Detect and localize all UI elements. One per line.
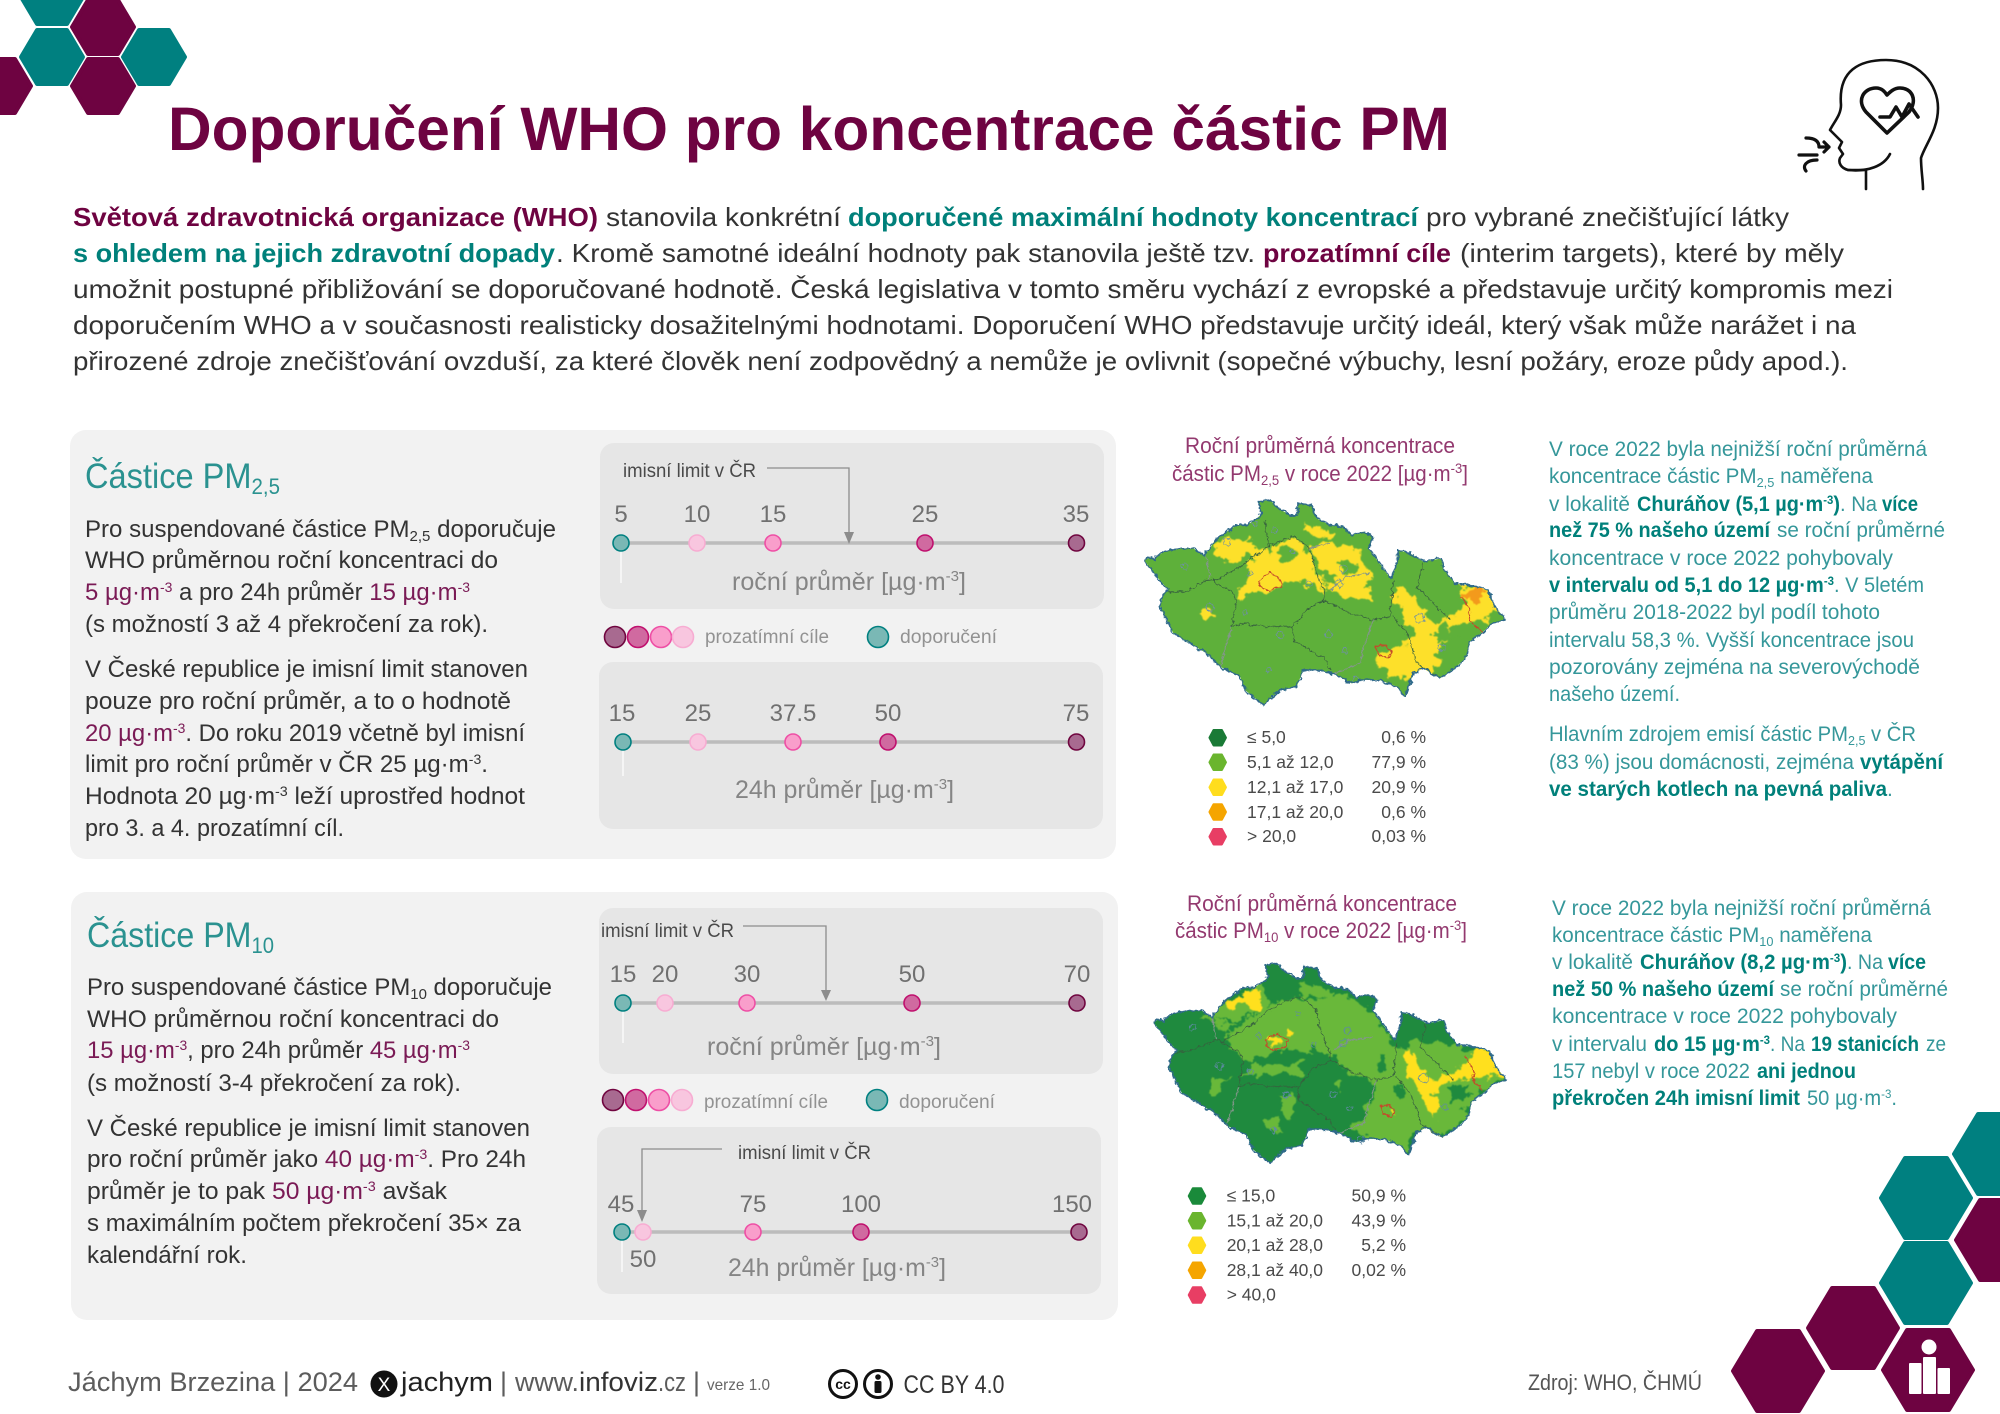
chart: annual average PM10: -3: [921, 1033, 934, 1050]
side text PM2.5: než 75 % našeho území: [1549, 519, 1771, 542]
footer: licence: [830, 1370, 1004, 1399]
decorative hexagons: bottom right: [1733, 1114, 2000, 1411]
legend PM10: [1189, 1186, 1406, 1304]
text block PM2.5: a pro 24h průměr: [172, 579, 369, 606]
side text PM10: než 50 % našeho území: [1552, 978, 1775, 1001]
text block PM10: 15 µg·m: [87, 1037, 175, 1064]
legend: targets: doporučení: [899, 1092, 996, 1113]
text block PM2.5: Pro suspendované částice PM: [85, 516, 409, 543]
side text PM10: více: [1888, 951, 1926, 974]
chart: annual average PM2.5: 25: [912, 501, 938, 528]
side text PM2.5: ve starých kotlech na pevná paliva: [1549, 778, 1887, 801]
side text PM10: překročen 24h imisní limit: [1552, 1087, 1800, 1110]
footer: licence: cc: [835, 1376, 851, 1392]
side text PM10: v intervalu: [1552, 1033, 1647, 1056]
footer: author: |: [693, 1367, 700, 1397]
side text PM2.5: v ČR: [1865, 723, 1916, 746]
legend PM10: 5,2 %: [1361, 1235, 1406, 1255]
side text PM2.5: V roce 2022 byla nejnižší roční průměrná: [1549, 438, 1927, 461]
text block PM10: . Pro 24h: [427, 1146, 526, 1173]
chart: 24h average PM2.5: 24h průměr [µg·m: [735, 776, 934, 804]
side text PM10: 19 stanicích: [1811, 1033, 1919, 1056]
side text PM10: -3: [1830, 951, 1841, 965]
chart: annual average PM2.5: [600, 443, 1104, 609]
side text PM2.5: naměřena: [1774, 465, 1873, 488]
map title PM10: [1175, 891, 1467, 945]
side text PM2.5: průměru 2018-2022 byl podíl tohoto: [1549, 601, 1880, 624]
text block PM2.5: limit pro roční průměr v ČR 25 µg·m: [85, 751, 467, 778]
side text PM2.5: 2,5: [1848, 733, 1865, 748]
side text PM10: 10: [1759, 934, 1773, 949]
side text PM2.5: [1549, 438, 1945, 801]
text block PM2.5: pro 3. a 4. prozatímní cíl.: [85, 815, 344, 842]
chart: 24h average PM2.5: 15: [609, 700, 635, 727]
side text PM10: Churáňov (8,2 µg·m: [1640, 951, 1836, 974]
legend PM10: 43,9 %: [1352, 1210, 1406, 1230]
map PM2.5: [1144, 500, 1505, 705]
icon: infoviz logo: [1909, 1340, 1950, 1394]
legend PM2.5: 0,6 %: [1381, 802, 1426, 822]
map title PM2.5: v roce 2022 [µg·m: [1279, 461, 1451, 486]
intro text: (interim targets), které by měly: [1460, 238, 1844, 268]
chart: 24h average PM10: 50: [630, 1246, 656, 1273]
text block PM2.5: 15 µg·m: [369, 579, 458, 606]
chart: 24h average PM2.5: 25: [685, 700, 711, 727]
map title PM10: Roční průměrná koncentrace: [1187, 891, 1457, 916]
intro text: Světová zdravotnická organizace (WHO): [73, 202, 598, 232]
side text PM2.5: ): [1833, 493, 1840, 516]
chart: 24h average PM2.5: ]: [947, 776, 954, 804]
map title PM10: částic PM: [1175, 918, 1270, 943]
text block PM10: WHO průměrnou roční koncentraci do: [87, 1006, 499, 1033]
text block PM10: s maximálním počtem překročení 35× za: [87, 1210, 522, 1237]
legend PM10: 50,9 %: [1352, 1186, 1406, 1206]
panel: PM2.5: [70, 430, 1116, 859]
side text PM2.5: Churáňov (5,1 µg·m: [1637, 493, 1833, 516]
legend PM2.5: 17,1 až 20,0: [1247, 802, 1344, 822]
footer: author: www.: [514, 1367, 579, 1397]
chart: annual average PM10: [599, 908, 1103, 1074]
legend: targets: prozatímní cíle: [704, 1092, 828, 1113]
intro text: s ohledem na jejich zdravotní dopady: [73, 238, 556, 268]
chart: annual average PM10: roční průměr [µg·m: [707, 1033, 920, 1061]
chart: annual average PM2.5: roční průměr [µg·m: [732, 568, 945, 596]
side text PM10: v lokalitě: [1552, 951, 1633, 974]
side text PM10: koncentrace částic PM: [1552, 924, 1763, 947]
text block PM10: průměr je to pak 50 µg·m: [87, 1178, 361, 1205]
side text PM2.5: koncentrace v roce 2022 pohybovaly: [1549, 547, 1893, 570]
chart: annual average PM2.5: -3: [946, 568, 959, 585]
icon: head with heart and breath: [1799, 60, 1938, 189]
text block PM10: doporučuje: [427, 974, 552, 1001]
chart: annual average PM2.5: ]: [959, 568, 966, 596]
side text PM2.5: vytápění: [1860, 751, 1944, 774]
map title PM2.5: ]: [1462, 461, 1468, 486]
text block PM10: 10: [410, 986, 427, 1003]
text block PM2.5: -3: [173, 720, 186, 736]
chart: 24h average PM10: ]: [939, 1254, 946, 1282]
side text PM10: -3: [1760, 1033, 1770, 1047]
side text PM10: V roce 2022 byla nejnižší roční průměrná: [1552, 897, 1931, 920]
side text PM2.5: koncentrace částic PM: [1549, 465, 1760, 488]
text block PM2.5: . Do roku 2019 včetně byl imisní: [185, 720, 525, 747]
legend PM10: 0,02 %: [1352, 1260, 1406, 1280]
intro text: pro vybrané znečišťující látky: [1426, 202, 1789, 232]
footer: author: [68, 1367, 770, 1398]
legend PM2.5: 12,1 až 17,0: [1247, 777, 1344, 797]
side text PM2.5: Hlavním zdrojem emisí částic PM: [1549, 723, 1859, 746]
side text PM2.5: (83 %) jsou domácnosti, zejména: [1549, 751, 1854, 774]
side text PM10: .: [1891, 1087, 1897, 1110]
side text PM10: ani jednou: [1757, 1060, 1856, 1083]
text block PM10: (s možností 3-4 překročení za rok).: [87, 1070, 461, 1097]
legend PM2.5: > 20,0: [1247, 826, 1296, 846]
side text PM10: . Na: [1770, 1033, 1805, 1056]
legend PM10: ≤ 15,0: [1227, 1186, 1275, 1206]
chart: annual average PM10: 30: [734, 961, 760, 988]
text block PM2.5: V České republice je imisní limit stanoven: [85, 655, 528, 683]
text block PM10: Pro suspendované částice PM: [87, 974, 411, 1001]
chart: 24h average PM10: 75: [740, 1191, 766, 1218]
legend PM2.5: 5,1 až 12,0: [1247, 752, 1334, 772]
text block PM2.5: [85, 516, 556, 842]
footer: author: |: [500, 1367, 507, 1397]
map title PM10: v roce 2022 [µg·m: [1278, 918, 1450, 943]
footer: author: Jáchym Brzezina | 2024: [68, 1367, 358, 1397]
chart: 24h average PM2.5: 75: [1063, 700, 1089, 727]
text block PM2.5: .: [481, 751, 488, 778]
source: Zdroj: WHO, ČHMÚ: [1528, 1370, 1702, 1395]
legend PM2.5: 77,9 %: [1372, 752, 1426, 772]
side text PM10: se roční průměrné: [1780, 978, 1948, 1001]
intro text: . Kromě samotné ideální hodnoty pak stanovila ještě tzv.: [556, 238, 1255, 268]
chart: 24h average PM10: 45: [608, 1191, 634, 1218]
map title PM10: ]: [1461, 918, 1467, 943]
side text PM2.5: 2,5: [1757, 475, 1774, 490]
map PM10: [1153, 963, 1506, 1163]
heading PM10: 10: [251, 933, 274, 958]
map title PM2.5: Roční průměrná koncentrace: [1185, 433, 1455, 458]
footer: author: infoviz: [579, 1367, 658, 1397]
chart: 24h average PM10: 150: [1052, 1191, 1092, 1218]
text block PM10: , pro 24h průměr: [187, 1037, 370, 1064]
chart: 24h average PM10: -3: [926, 1254, 939, 1271]
text block PM10: pro roční průměr jako 40 µg·m: [87, 1146, 413, 1173]
decorative hexagons: top left: [0, 0, 185, 113]
text block PM2.5: Hodnota 20 µg·m: [85, 783, 271, 810]
heading PM2.5: Částice PM: [85, 457, 264, 496]
chart: 24h average PM2.5: -3: [934, 776, 947, 793]
side text PM2.5: pozorovány zejména na severovýchodě: [1549, 656, 1920, 679]
intro text: umožnit postupné přibližování se doporučované hodnotě. Česká legislativa v tomto směru vychází z evropské a představuje určitý kompromis mezi: [73, 274, 1893, 304]
legend PM10: 15,1 až 20,0: [1227, 1210, 1323, 1230]
chart: annual average PM2.5: 10: [684, 501, 710, 528]
chart: annual average PM2.5: imisní limit v ČR: [623, 460, 756, 482]
side text PM2.5: našeho území.: [1549, 683, 1680, 706]
chart: annual average PM10: imisní limit v ČR: [601, 920, 734, 942]
side text PM2.5: . Na: [1840, 493, 1877, 516]
chart: 24h average PM2.5: 37.5: [770, 700, 816, 727]
chart: annual average PM10: 15: [610, 961, 636, 988]
legend: targets: prozatímní cíle: [705, 627, 829, 648]
text block PM10: 45 µg·m: [370, 1037, 458, 1064]
panel: PM10: [71, 892, 1118, 1320]
side text PM2.5: -3: [1823, 493, 1834, 507]
text block PM10: V České republice je imisní limit stanoven: [87, 1114, 530, 1142]
intro text: doporučené maximální hodnoty koncentrací: [848, 202, 1419, 232]
text block PM10: avšak: [376, 1178, 448, 1205]
text block PM2.5: -3: [160, 579, 173, 595]
legend PM10: 28,1 až 40,0: [1227, 1260, 1323, 1280]
chart: annual average PM10: 20: [652, 961, 678, 988]
text block PM2.5: doporučuje: [430, 516, 556, 543]
legend PM2.5: [1210, 727, 1426, 846]
legend: targets: doporučení: [900, 627, 998, 648]
chart: annual average PM2.5: 15: [760, 501, 786, 528]
chart: annual average PM10: 70: [1064, 961, 1090, 988]
chart: 24h average PM10: 24h průměr [µg·m: [728, 1254, 927, 1282]
legend PM10: > 40,0: [1227, 1284, 1276, 1304]
intro text: přirozené zdroje znečišťování ovzduší, za které člověk není zodpovědný a nemůže je ovlivnit (sopečné výbuchy, lesní požáry, eroze půdy apod.).: [73, 346, 1848, 376]
text block PM2.5: pouze pro roční průměr, a to o hodnotě: [85, 688, 511, 715]
title: Doporučení WHO pro koncentrace částic PM: [168, 95, 1450, 163]
footer: author: .cz: [658, 1367, 686, 1397]
side text PM10: ze: [1926, 1033, 1946, 1056]
legend PM2.5: ≤ 5,0: [1247, 727, 1286, 747]
chart: annual average PM2.5: 35: [1063, 501, 1089, 528]
chart: 24h average PM2.5: [599, 662, 1103, 829]
side text PM10: 50 µg·m: [1807, 1087, 1884, 1110]
side text PM2.5: intervalu 58,3 %. Vyšší koncentrace jsou: [1549, 629, 1914, 652]
side text PM10: ): [1840, 951, 1847, 974]
footer: author: jachym: [400, 1367, 493, 1397]
map title PM10: -3: [1450, 917, 1461, 933]
map title PM2.5: -3: [1451, 460, 1462, 476]
map title PM2.5: [1172, 433, 1468, 488]
footer: author: X: [378, 1375, 391, 1396]
chart: 24h average PM10: 100: [841, 1191, 881, 1218]
text block PM2.5: -3: [469, 751, 482, 767]
side text PM2.5: .: [1887, 778, 1893, 801]
map title PM2.5: částic PM: [1172, 461, 1267, 486]
text block PM10: kalendářní rok.: [87, 1242, 247, 1269]
legend PM10: 20,1 až 28,0: [1227, 1235, 1323, 1255]
text block PM2.5: leží uprostřed hodnot: [288, 783, 525, 810]
text block PM2.5: 2,5: [410, 528, 430, 545]
heading PM2.5: 2,5: [252, 474, 280, 499]
side text PM2.5: . V 5letém: [1834, 574, 1924, 597]
text block PM10: -3: [363, 1178, 376, 1194]
side text PM10: . Na: [1847, 951, 1883, 974]
text block PM2.5: 20 µg·m: [85, 720, 173, 747]
text block PM10: -3: [458, 1037, 470, 1053]
side text PM10: 157 nebyl v roce 2022: [1552, 1060, 1750, 1083]
chart: annual average PM2.5: 5: [614, 501, 628, 528]
heading PM10: Částice PM: [87, 916, 266, 955]
map title PM2.5: 2,5: [1261, 472, 1279, 488]
map title PM10: 10: [1264, 929, 1279, 945]
side text PM10: -3: [1881, 1087, 1892, 1101]
chart: 24h average PM2.5: 50: [875, 700, 901, 727]
legend: targets: [602, 1090, 996, 1113]
text block PM10: [87, 974, 552, 1269]
side text PM2.5: -3: [1824, 574, 1834, 588]
side text PM2.5: se roční průměrné: [1777, 519, 1945, 542]
text block PM10: -3: [415, 1146, 427, 1162]
intro text: prozatímní cíle: [1263, 238, 1451, 268]
footer: author: verze 1.0: [707, 1377, 770, 1394]
side text PM10: do 15 µg·m: [1654, 1033, 1765, 1056]
text block PM2.5: -3: [275, 783, 288, 799]
text block PM2.5: -3: [458, 579, 470, 595]
text block PM10: -3: [175, 1037, 187, 1053]
side text PM10: koncentrace v roce 2022 pohybovaly: [1552, 1005, 1897, 1028]
chart: annual average PM10: 50: [899, 961, 925, 988]
text block PM2.5: 5 µg·m: [85, 579, 160, 606]
intro text: [73, 202, 1893, 376]
text block PM2.5: WHO průměrnou roční koncentraci do: [85, 547, 498, 574]
legend PM2.5: 20,9 %: [1372, 777, 1426, 797]
footer: licence: CC BY 4.0: [904, 1371, 1004, 1399]
side text PM2.5: v intervalu od 5,1 do 12 µg·m: [1549, 574, 1838, 597]
text block PM2.5: (s možností 3 až 4 překročení za rok).: [85, 611, 488, 638]
intro text: doporučením WHO a v současnosti realisticky dosažitelnými hodnotami. Doporučení WHO představuje určitý ideál, který však může narážet i na: [73, 310, 1857, 340]
side text PM2.5: více: [1882, 493, 1918, 516]
side text PM10: naměřena: [1773, 924, 1872, 947]
intro text: stanovila konkrétní: [606, 202, 842, 232]
side text PM10: [1552, 897, 1948, 1110]
side text PM2.5: v lokalitě: [1549, 493, 1630, 516]
legend PM2.5: 0,03 %: [1372, 826, 1426, 846]
legend PM2.5: 0,6 %: [1381, 727, 1426, 747]
legend: targets: [604, 626, 998, 648]
chart: annual average PM10: ]: [934, 1033, 941, 1061]
chart: 24h average PM10: [597, 1127, 1101, 1294]
chart: 24h average PM10: imisní limit v ČR: [738, 1142, 871, 1164]
